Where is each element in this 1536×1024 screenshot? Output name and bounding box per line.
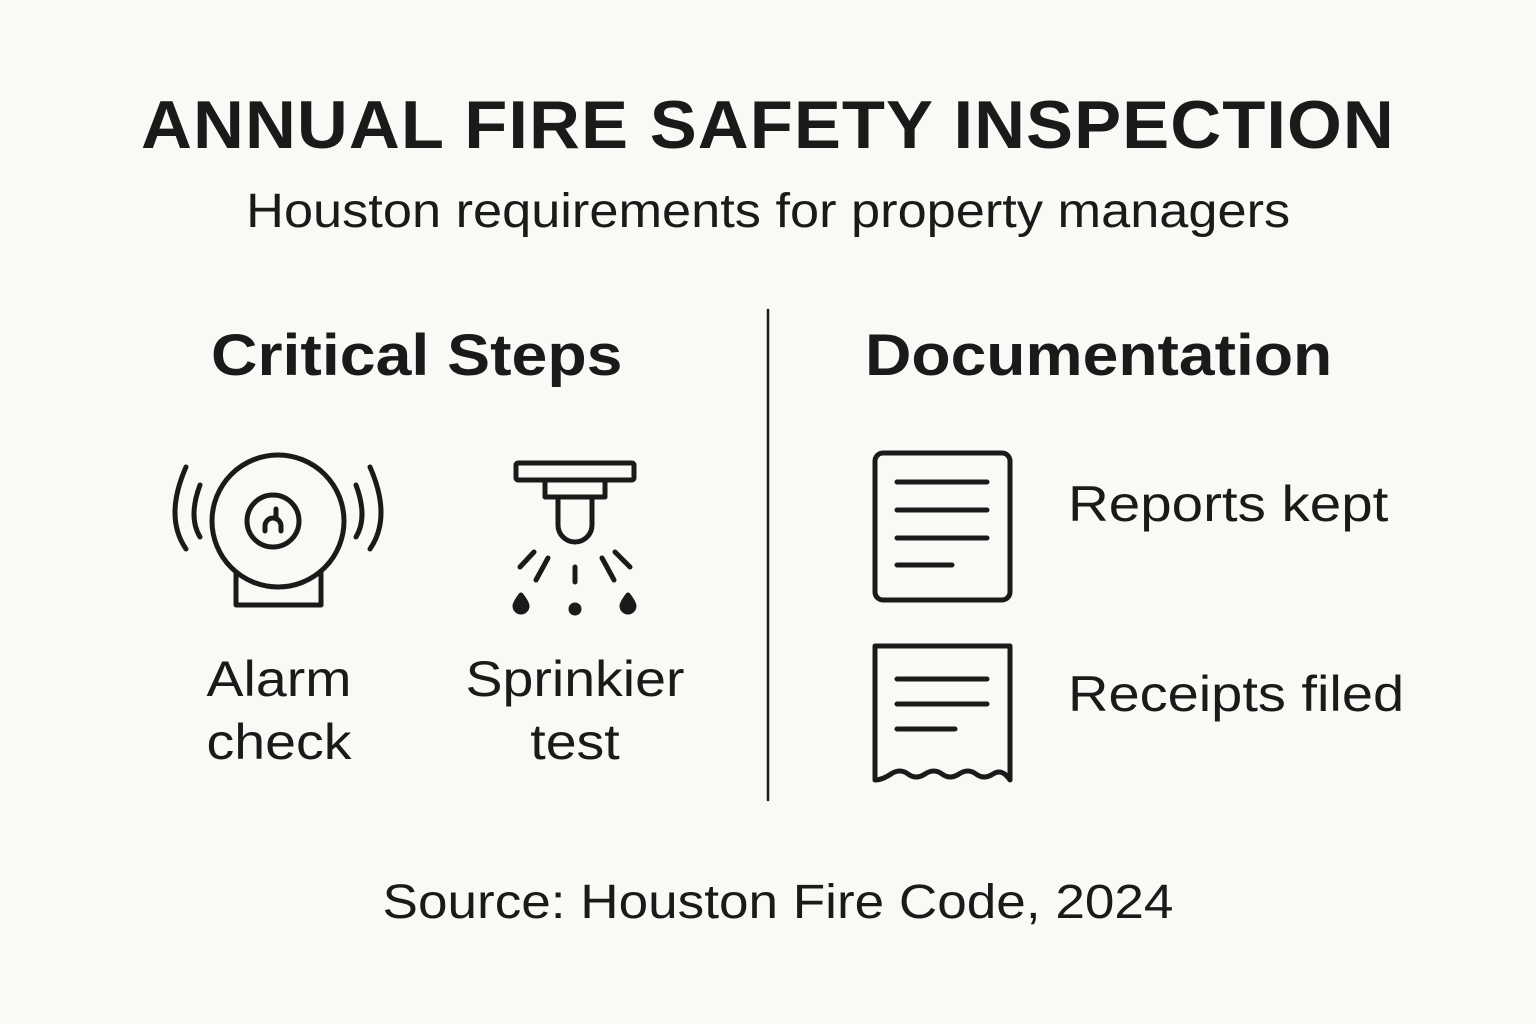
heading: documentation: Documentation [865, 323, 1332, 388]
label: reports kept: Reports kept [1068, 476, 1388, 532]
label: sprinkler test [465, 651, 684, 770]
label: receipts filed: Receipts filed [1068, 666, 1404, 722]
source: Source: Houston Fire Code, 2024 [383, 876, 1173, 929]
title: ANNUAL FIRE SAFETY INSPECTION [141, 87, 1395, 163]
label: sprinkler test: Sprinkier [465, 651, 684, 707]
label: alarm check [206, 651, 352, 770]
icon: alarm [175, 455, 381, 605]
divider [767, 310, 769, 800]
icon: sprinkler [515, 463, 634, 613]
label: sprinkler test: test [530, 714, 620, 770]
subtitle: Houston requirements for property managers [246, 185, 1290, 238]
icon: report document [875, 453, 1010, 600]
label: alarm check: check [207, 714, 351, 770]
label: alarm check: Alarm [207, 651, 351, 707]
icon: receipt [875, 646, 1010, 780]
heading: critical steps: Critical Steps [211, 323, 622, 388]
